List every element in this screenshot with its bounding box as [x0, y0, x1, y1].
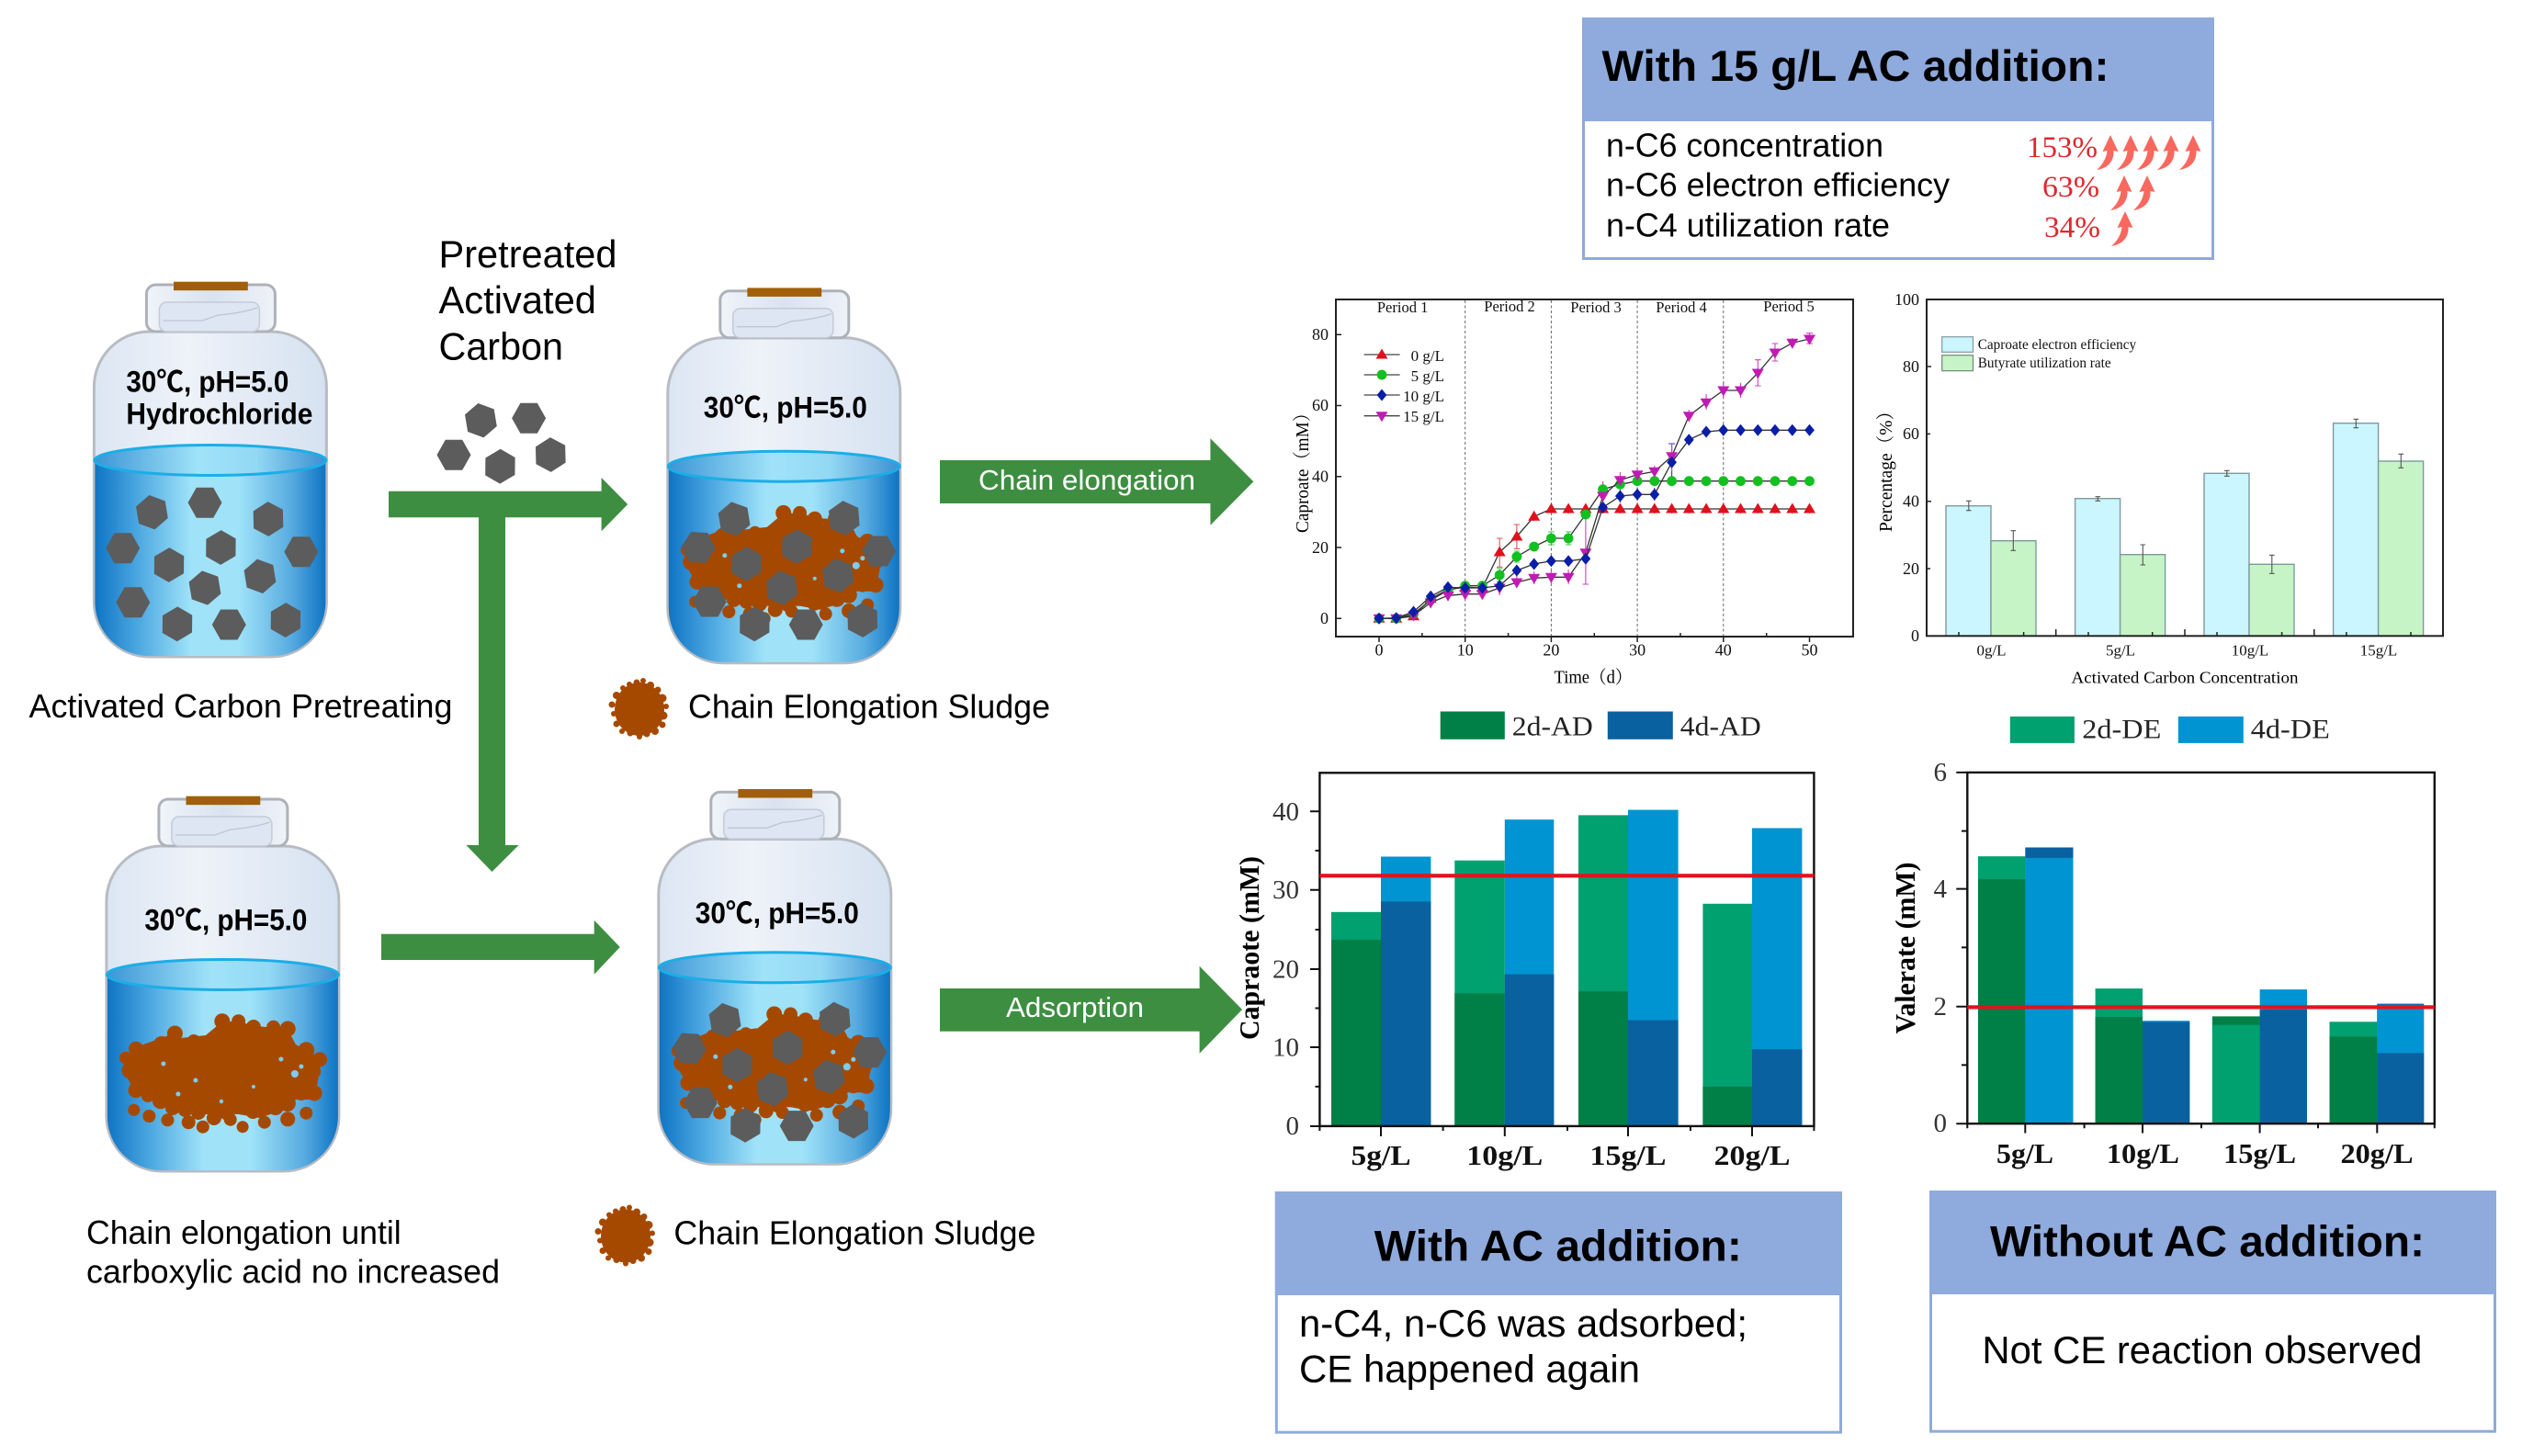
chart: valerate bars [1889, 758, 2435, 1169]
series: 10 g/L [1374, 424, 1815, 625]
panel: with 15 g/L AC addition: n-C6 concentration [1606, 127, 1883, 164]
chart: valerate bars: 2 [1933, 992, 1947, 1021]
arrow: adsorption: Adsorption [1006, 991, 1144, 1023]
label: pretreated activated carbon: Carbon [439, 325, 563, 367]
legend: 2d-DE and 4d-DE: 4d-DE [2251, 715, 2330, 744]
chart: caproate over time line chart: 0 [1320, 609, 1329, 627]
series: 5 g/L [1374, 476, 1815, 624]
chart: percentage bar chart: 20 [1903, 559, 1919, 578]
chart: caproate over time line chart: 60 [1312, 396, 1329, 414]
chart: valerate bars: 20g/L [2341, 1137, 2413, 1169]
bottle: sludge with activated carbon, chain elongation: 30℃, pH=5.0 [704, 390, 867, 423]
panel: with AC addition [1275, 1191, 1842, 1432]
panel: without AC addition: Without AC addition: [1990, 1216, 2425, 1265]
label: pretreated activated carbon [439, 232, 617, 367]
chart: percentage bar chart: Activated Carbon Concentration [2071, 669, 2299, 687]
legend: 2d-DE and 4d-DE [2010, 715, 2330, 744]
panel: with 15 g/L AC addition: 63% [2042, 171, 2099, 204]
caption: chain elongation until no increase: carboxylic acid no increased [86, 1253, 500, 1290]
legend: chain elongation sludge top [608, 678, 1050, 739]
chart: valerate bars: Valerate (mM) [1889, 862, 1921, 1034]
chart: caproate adsorption bars: 20 [1272, 955, 1299, 985]
chart: percentage bar chart: 40 [1903, 492, 1919, 511]
bottle: activated carbon pretreating: Hydrochloride [126, 398, 312, 431]
chart: caproate over time line chart: Period 3 [1570, 299, 1622, 316]
chart: caproate adsorption bars: Capraote (mM) [1233, 856, 1265, 1040]
chart: percentage bar chart: Percentage（%） [1876, 402, 1896, 532]
chart: caproate adsorption bars: 5g/L [1351, 1139, 1411, 1171]
error bars [1497, 333, 1813, 595]
chart: caproate adsorption bars: 20g/L [1714, 1139, 1790, 1171]
series: 0 g/L [1373, 503, 1815, 623]
legend: 2d-DE and 4d-DE: 2d-DE [2082, 715, 2161, 744]
chart: caproate over time line chart: Period 1 [1377, 299, 1428, 316]
bottle: sludge with activated carbon, chain elongation [668, 288, 900, 663]
arrow: carbon feed T-arrow right and down [389, 478, 628, 872]
chart: caproate over time line chart: 10 [1457, 641, 1474, 660]
caption: chain elongation until no increase: Chain elongation until [86, 1213, 401, 1251]
arrow: adsorption [940, 966, 1242, 1054]
chart: caproate adsorption bars: 30 [1272, 875, 1299, 905]
chart: percentage bar chart: 15g/L [2360, 641, 2397, 660]
legend: efficiency and utilization [1942, 337, 2136, 371]
caption: chain elongation until no increase [86, 1213, 500, 1290]
series: 15 g/L [1373, 334, 1815, 625]
chart: percentage bar chart [1876, 290, 2443, 687]
legend: 2d-AD and 4d-AD: 2d-AD [1512, 711, 1593, 742]
legend: chain elongation sludge bottom: Chain Elongation Sludge [673, 1214, 1035, 1251]
chart: percentage bar chart: 5g/L [2106, 641, 2135, 660]
chart: caproate adsorption bars: 10g/L [1466, 1139, 1543, 1171]
chart: caproate over time line chart: Period 4 [1656, 299, 1707, 316]
panel: without AC addition [1929, 1191, 2496, 1431]
label: pretreated activated carbon: Pretreated [439, 232, 617, 276]
chart: percentage bar chart: 60 [1903, 424, 1919, 443]
chart: percentage bar chart: 0 [1911, 626, 1919, 645]
chart: caproate over time line chart: Time（d） [1555, 667, 1632, 687]
chart: caproate adsorption bars: 0 [1286, 1112, 1299, 1141]
panel: with 15 g/L AC addition: 153% [2027, 131, 2098, 164]
legend: 2d-AD and 4d-AD [1441, 711, 1761, 742]
chart: caproate over time line chart: 80 [1312, 325, 1329, 344]
panel: with AC addition: CE happened again [1299, 1347, 1640, 1391]
panel: with AC addition: With AC addition: [1374, 1221, 1742, 1270]
legend: 2d-AD and 4d-AD: 4d-AD [1680, 711, 1761, 742]
chart: percentage bar chart: 10g/L [2232, 641, 2268, 660]
chart: caproate over time line chart: Caproate（mM） [1293, 404, 1313, 533]
chart: valerate bars: 0 [1933, 1109, 1947, 1138]
chart: caproate adsorption bars [1233, 773, 1814, 1171]
legend: efficiency and utilization: Caproate electron efficiency [1978, 337, 2136, 353]
chart: caproate over time line chart: Period 2 [1484, 298, 1535, 315]
chart: percentage bar chart: 80 [1903, 357, 1919, 376]
chart: caproate over time line chart: 0 [1374, 641, 1384, 660]
bottle: sludge with activated carbon, adsorption: 30℃, pH=5.0 [696, 897, 859, 930]
legend: AC dose series [1364, 347, 1444, 425]
chart: caproate over time line chart: 50 [1801, 641, 1817, 660]
chart: caproate over time line chart: 20 [1543, 641, 1559, 660]
legend: AC dose series: 10 g/L [1403, 388, 1444, 405]
arrow: chain elongation [940, 438, 1253, 525]
chart: valerate bars: 4 [1933, 875, 1948, 904]
caption: activated carbon pretreating: Activated Carbon Pretreating [29, 687, 452, 725]
panel: with 15 g/L AC addition [1582, 17, 2214, 259]
panel: without AC addition: Not CE reaction observed [1982, 1328, 2422, 1371]
panel: with 15 g/L AC addition: With 15 g/L AC addition: [1602, 41, 2109, 90]
chart: caproate over time line chart: 40 [1715, 641, 1732, 660]
legend: AC dose series: 15 g/L [1403, 408, 1444, 425]
bottle: chain elongation sludge only: 30℃, pH=5.0 [144, 904, 307, 937]
chart: percentage bar chart: 100 [1894, 290, 1919, 309]
legend: efficiency and utilization: Butyrate utilization rate [1978, 356, 2111, 371]
panel: with 15 g/L AC addition: n-C6 electron efficiency [1606, 165, 1950, 204]
legend: AC dose series: 5 g/L [1411, 367, 1444, 385]
chart: valerate bars: 5g/L [1996, 1137, 2053, 1169]
bottle: activated carbon pretreating [94, 282, 326, 657]
bottle: activated carbon pretreating: 30℃, pH=5.0 [126, 366, 288, 399]
bottle: chain elongation sludge only [107, 796, 339, 1171]
panel: with AC addition: n-C4, n-C6 was adsorbed; [1299, 1302, 1747, 1345]
chart: valerate bars: 10g/L [2107, 1137, 2179, 1169]
chart: caproate over time line chart [1293, 298, 1853, 687]
legend: chain elongation sludge top: Chain Elongation Sludge [688, 687, 1050, 726]
legend: AC dose series: 0 g/L [1411, 347, 1444, 365]
chart: caproate adsorption bars: 10 [1272, 1033, 1299, 1062]
chart: caproate adsorption bars: 40 [1272, 797, 1299, 827]
icon: loose activated carbon particles [437, 401, 572, 488]
chart: percentage bar chart: 0g/L [1976, 641, 2007, 660]
chart: caproate over time line chart: Period 5 [1763, 298, 1815, 315]
panel: with 15 g/L AC addition: 34% [2044, 211, 2100, 244]
legend: chain elongation sludge bottom [595, 1205, 1035, 1266]
arrow: sludge to adsorption bottle [381, 920, 620, 975]
arrow: chain elongation: Chain elongation [978, 464, 1195, 496]
chart: valerate bars: 15g/L [2223, 1137, 2296, 1169]
label: pretreated activated carbon: Activated [439, 278, 596, 322]
chart: caproate over time line chart: 30 [1629, 641, 1646, 660]
chart: valerate bars: 6 [1933, 758, 1947, 787]
chart: caproate over time line chart: 20 [1312, 538, 1329, 557]
chart: caproate adsorption bars: 15g/L [1589, 1139, 1667, 1171]
chart: caproate over time line chart: 40 [1312, 467, 1329, 485]
bottle: sludge with activated carbon, adsorption [659, 789, 891, 1164]
panel: with 15 g/L AC addition: n-C4 utilization rate [1606, 206, 1890, 244]
